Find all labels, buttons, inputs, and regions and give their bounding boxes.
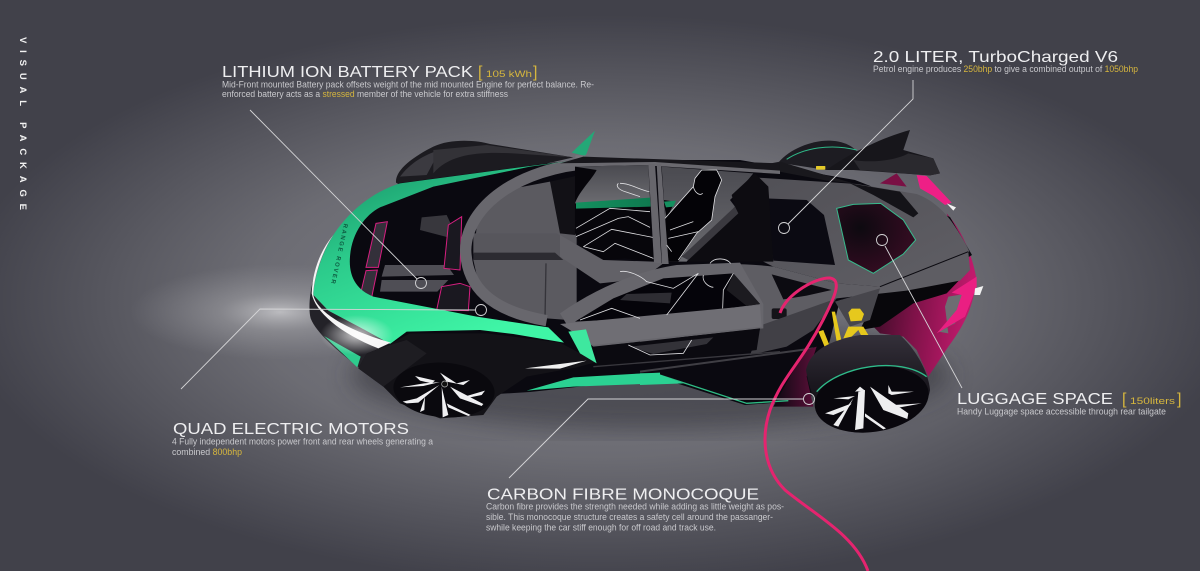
center gray panel <box>473 182 577 321</box>
rear deck <box>753 177 969 287</box>
heading: 2.0 LITER, TurboCharged V6 <box>873 49 1118 66</box>
marker: motors <box>476 304 486 316</box>
callout: quad electric motors <box>172 421 433 457</box>
driver silhouette upper <box>663 170 722 262</box>
rear section <box>640 130 983 407</box>
crimson tint near wheel <box>773 347 817 407</box>
rim face <box>810 359 933 440</box>
pink strut <box>917 175 952 205</box>
side vent <box>772 274 832 299</box>
lower rail highlight <box>560 305 762 345</box>
description: 4 Fully independent motors power front and rear wheels generating a <box>172 436 433 446</box>
callout: V6 engine <box>873 49 1138 74</box>
side skirt panel <box>750 298 837 355</box>
hub <box>442 381 448 387</box>
marker: battery <box>416 278 426 288</box>
window left <box>575 165 653 262</box>
driver outlines <box>576 170 733 355</box>
far front wheel arch <box>396 141 573 185</box>
rear crimson body <box>873 173 976 377</box>
canopy arch <box>466 163 593 321</box>
panel seams <box>545 263 546 318</box>
sill green <box>527 373 660 391</box>
capacity: ] <box>1177 391 1181 408</box>
front section <box>309 161 660 421</box>
car illustration <box>309 130 983 571</box>
window right <box>662 167 753 262</box>
lamp gap <box>938 293 968 333</box>
description: Handy Luggage space accessible through rear tailgate <box>957 406 1166 416</box>
leader lines and markers <box>181 80 962 478</box>
callout: lithium ion battery <box>222 64 594 99</box>
description: Carbon fibre provides the strength needed while adding as little weight as pos- <box>486 502 784 512</box>
pillars <box>648 164 662 263</box>
cabin <box>560 157 780 367</box>
capacity: 105 kWh <box>486 69 532 80</box>
callout: luggage space <box>957 391 1181 416</box>
yellow tab <box>816 166 825 170</box>
rim blades <box>400 373 485 417</box>
luggage window <box>837 203 916 273</box>
upper rails <box>560 157 780 171</box>
dark under-deck wedge <box>860 279 960 330</box>
main dark body <box>340 160 972 405</box>
headlight glow <box>130 264 430 360</box>
leader: carbon fibre <box>509 399 803 478</box>
front wheel <box>392 359 496 421</box>
heading: CARBON FIBRE MONOCOQUE <box>487 486 759 504</box>
white side streak <box>525 361 587 369</box>
description line two: combined 800bhp <box>172 447 242 457</box>
green band <box>576 198 651 209</box>
gray structural beam <box>640 252 970 343</box>
skirt line <box>640 348 813 372</box>
headlight strip <box>312 235 391 348</box>
leader: engine <box>788 80 913 224</box>
tyre <box>392 359 496 421</box>
capacity: 150liters <box>1130 396 1175 407</box>
under-rail interior <box>597 328 760 367</box>
top rail <box>753 162 853 183</box>
marker: luggage <box>876 234 888 246</box>
suspension strut <box>835 288 880 327</box>
heading: LITHIUM ION BATTERY PACK <box>222 64 473 81</box>
rear seam <box>880 252 968 287</box>
green pillar accent <box>664 201 676 207</box>
rear wheel <box>806 335 933 440</box>
marker: engine <box>778 222 790 234</box>
tunnel crossing <box>560 235 663 283</box>
brand lettering: RANGE ROVER <box>329 223 348 286</box>
leader: battery <box>250 110 417 279</box>
description line three: swhile keeping the car stiff enough for off road and track use. <box>486 522 716 532</box>
pink compartment outlines <box>361 217 470 311</box>
door handle <box>772 308 787 319</box>
dark pillar band <box>550 167 597 235</box>
tyre green arc <box>817 366 927 392</box>
lower interior details <box>620 293 672 303</box>
lower sill dark band <box>593 352 780 367</box>
yellow suspension <box>832 312 869 342</box>
door wedge <box>568 329 597 363</box>
capacity: [ <box>1122 391 1126 408</box>
description line two: enforced battery acts as a stressed member of the vehicle for extra stiffness <box>222 89 508 99</box>
heading: LUGGAGE SPACE <box>957 391 1113 408</box>
description: Mid-Front mounted Battery pack offsets weight of the mid mounted Engine for perfect balance. Re- <box>222 80 594 90</box>
callout: carbon fibre monocoque <box>486 486 784 532</box>
lower window <box>575 273 760 322</box>
white tail lights <box>947 203 956 211</box>
description line two: sible. This monocoque structure creates a safety cell around the passanger- <box>486 512 773 522</box>
front compartment plates <box>420 215 458 240</box>
side title: VISUAL PACKAGE <box>17 37 28 210</box>
bumper <box>309 277 390 368</box>
leader: luggage <box>885 246 962 388</box>
front fender <box>358 333 597 418</box>
rim blades <box>825 385 922 430</box>
dark cockpit behind driver <box>687 173 773 262</box>
green sill outline <box>640 374 788 403</box>
heading: QUAD ELECTRIC MOTORS <box>173 421 409 438</box>
seat strut <box>682 207 738 260</box>
marker: carbon fibre <box>804 394 814 404</box>
pink lamp <box>937 277 977 333</box>
capacity: [ <box>478 64 483 81</box>
leader: motors <box>181 309 475 389</box>
deck dark stripe <box>850 183 918 217</box>
capacity: ] <box>533 64 537 81</box>
far rear wheel <box>778 141 860 170</box>
car shadow <box>350 320 950 430</box>
description: Petrol engine produces 250bhp to give a combined output of 1050bhp <box>873 64 1138 74</box>
center tunnel <box>473 233 577 267</box>
beam <box>560 263 763 347</box>
tyre <box>806 335 930 433</box>
far green door mirror <box>572 131 595 161</box>
headlight bloom <box>320 315 393 355</box>
green shell <box>313 161 574 344</box>
engine window <box>765 198 835 265</box>
lower green sliver <box>324 336 361 367</box>
rear wing <box>827 130 940 175</box>
window left sky <box>575 165 650 203</box>
pink charging cable <box>765 278 868 571</box>
